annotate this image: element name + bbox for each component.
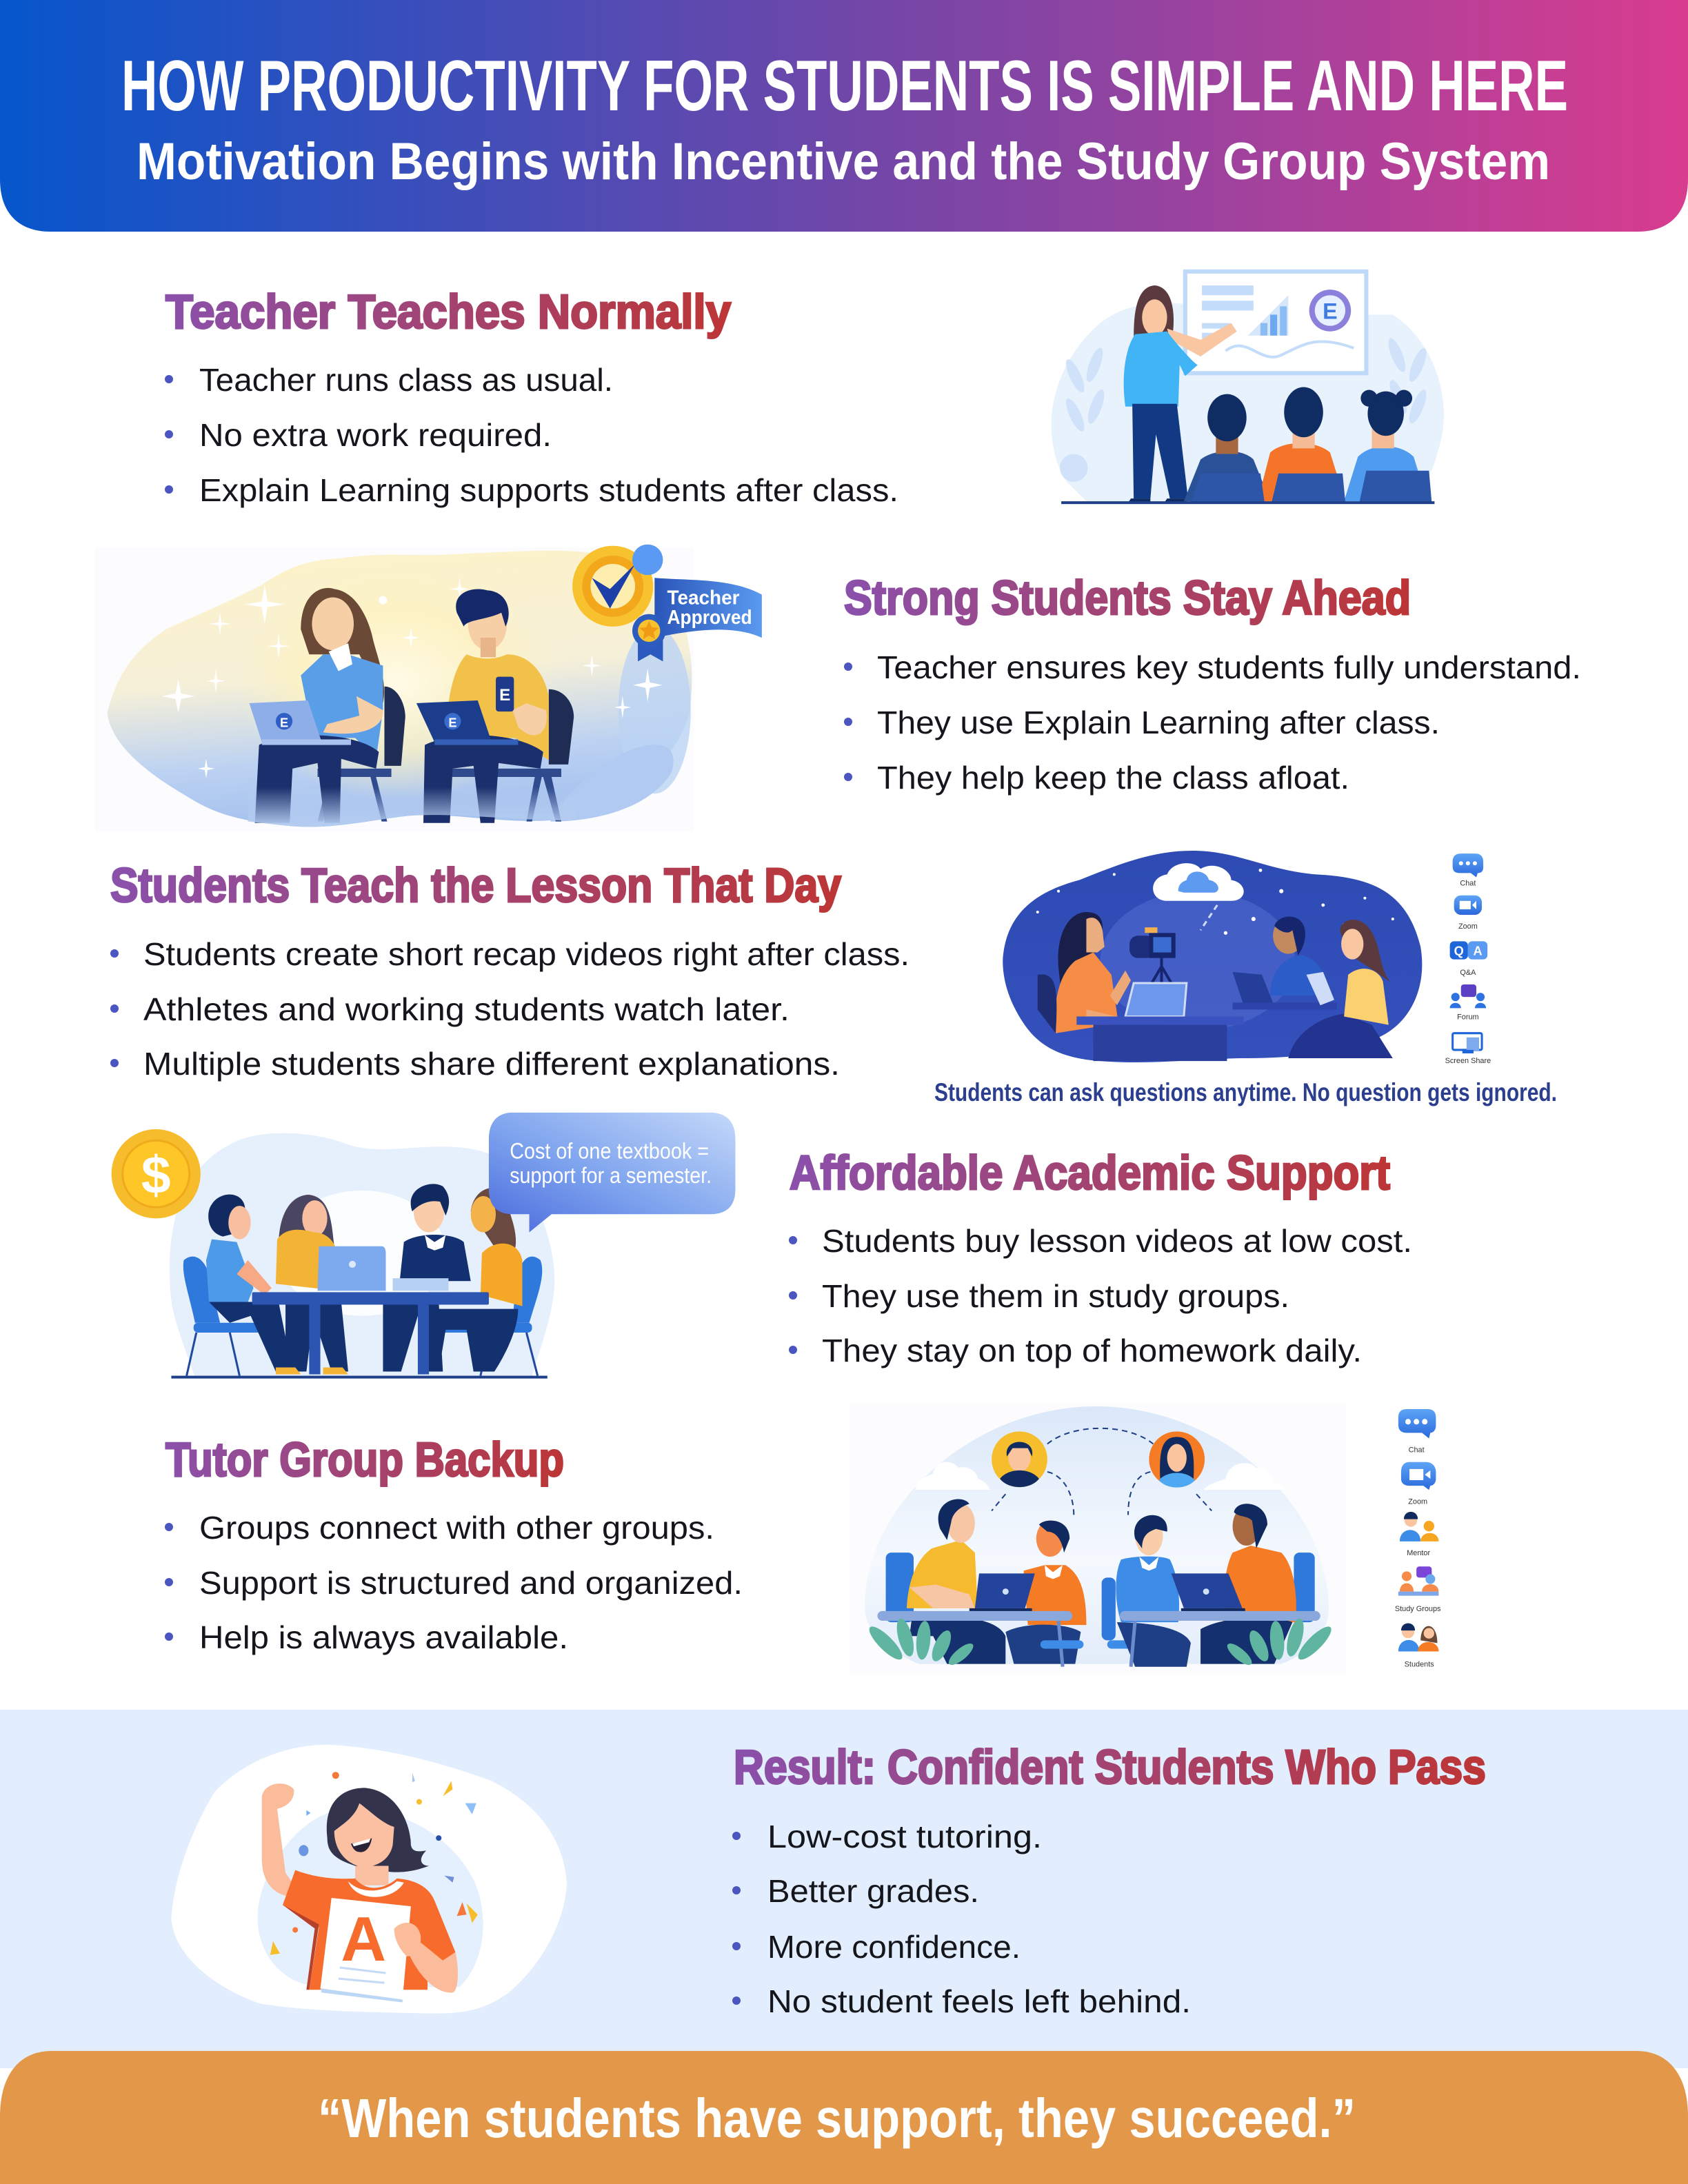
laptop and table [1076,983,1244,1061]
bullet list: Explain Learning supports students after class. [199,472,898,508]
icon: study groups [1395,1566,1441,1613]
avatar: mentor woman [1149,1431,1205,1488]
bullet list: No student feels left behind. [767,1983,1191,2019]
icon: screen share [1445,1033,1491,1065]
icon: zoom: Zoom [1458,922,1478,931]
icon: Q&A [1450,941,1487,977]
illustration: tutor groups connecting [850,1404,1441,1674]
icon: students: Students [1405,1661,1434,1669]
icon: dollar coin: $ [141,1146,171,1205]
bullet list: Teacher ensures key students fully understand. [877,649,1581,685]
camera on tripod [1129,927,1176,983]
bullet list: They help keep the class afloat. [877,760,1349,796]
icon: mentor [1400,1512,1438,1557]
bullet list: Athletes and working students watch later. [143,991,790,1027]
graded paper [321,1898,421,2002]
speech bubble: Cost of one textbook = [510,1138,709,1163]
section: affordable academic support [789,1146,1412,1368]
raised arm and girl [262,1783,458,1992]
section: teacher teaches normally [165,285,898,508]
badge: teacher approved: Teacher [667,587,740,609]
confetti [270,1772,478,1955]
bullet list: Better grades. [767,1873,979,1909]
bullet list: They use Explain Learning after class. [877,705,1440,740]
boy with phone: E [448,716,456,729]
speech bubble [489,1113,735,1233]
bullet list [789,1223,1412,1368]
bullet list: Help is always available. [199,1619,568,1655]
heading: Students Teach the Lesson That Day [110,858,841,912]
boy with phone [416,589,574,823]
bullet list: Multiple students share different explanations. [143,1046,840,1082]
section: result [732,1740,1486,2019]
table and laptop [252,1246,489,1375]
badge: teacher approved: Approved [667,606,752,628]
heading: Strong Students Stay Ahead [844,571,1411,625]
heading: Tutor Group Backup [165,1433,564,1486]
icon: study groups: Study Groups [1395,1605,1441,1613]
tool icons column [1395,1409,1441,1669]
bullet list: Students buy lesson videos at low cost. [822,1223,1412,1259]
illustration: strong students with badge [94,545,762,831]
bullet list: No extra work required. [199,417,552,453]
leaves [1060,336,1429,482]
girl with laptop: E [280,716,288,729]
bullet list [165,1510,743,1655]
whiteboard: E [1323,299,1338,324]
illustration: recording a recap video [1003,851,1491,1065]
person 4 [439,1188,522,1372]
tool icons column [1445,853,1491,1065]
chairs [183,1257,542,1333]
presenter [1038,912,1131,1033]
icon: Q&A: Q&A [1460,969,1476,977]
person 2 [276,1195,348,1375]
footer banner [0,2051,1688,2184]
fade over legs [248,787,575,827]
cloud [1153,863,1244,930]
icon: chat: Chat [1409,1446,1425,1455]
bullet list: Students create short recap videos right after class. [143,936,910,972]
section: strong students stay ahead [844,571,1581,796]
bullet list: They stay on top of homework daily. [822,1333,1362,1368]
illustration: confident student with A paper [171,1745,567,2014]
icon: zoom [1401,1462,1436,1506]
icon: chat: Chat [1460,880,1476,888]
sparkles [161,578,662,778]
subtitle: Motivation Begins with Incentive and the Study Group System [137,132,1550,191]
icon: dollar coin [112,1129,201,1218]
heading: Affordable Academic Support [790,1146,1390,1200]
bullet list: Low-cost tutoring. [767,1819,1042,1854]
icon: chat [1398,1409,1436,1455]
quote: “When students have support, they succeed.” [318,2087,1356,2149]
illustration: study group with coin and speech bubble [112,1113,735,1379]
bullet list: More confidence. [767,1929,1021,1965]
icon: students [1398,1624,1438,1669]
avatar: mentor man [992,1431,1047,1487]
icon: forum [1450,984,1486,1021]
icon: chat [1453,853,1483,888]
connecting dashes [992,1428,1212,1515]
heading: Result: Confident Students Who Pass [734,1740,1486,1794]
icon: forum: Forum [1457,1013,1479,1021]
result band [0,1710,1688,2068]
plant [865,1617,976,1668]
plant [1224,1617,1336,1668]
bullet list: They use them in study groups. [822,1278,1289,1314]
bullet list: Groups connect with other groups. [199,1510,714,1546]
icon: zoom: Zoom [1408,1497,1427,1506]
bullet list: Teacher runs class as usual. [199,362,613,398]
icon: Q&A: Q [1454,944,1464,958]
icon: zoom [1454,896,1482,931]
whiteboard [1185,272,1366,373]
header banner [0,0,1688,232]
boy with phone: E [499,686,510,705]
group right [1102,1504,1336,1668]
illustration: teacher at whiteboard [1052,272,1444,504]
bullet list [732,1819,1191,2019]
person 3 [383,1184,471,1372]
person 1 [206,1195,292,1372]
section: students teach the lesson [110,858,910,1082]
section: tutor group backup [165,1433,743,1655]
caption: ask questions: Students can ask questions anytime. No question gets ignored. [934,1078,1557,1106]
students [1061,387,1434,504]
bullet list [110,936,910,1082]
bullet list [844,649,1581,796]
heading: Teacher Teaches Normally [165,285,731,338]
icon: mentor: Mentor [1407,1549,1430,1557]
speech bubble: support for a semester. [510,1163,712,1188]
bullet list: Support is structured and organized. [199,1565,743,1601]
graded paper: A [341,1905,386,1974]
bullet list [165,362,898,508]
girl with laptop [250,588,405,823]
icon: Q&A: A [1473,944,1483,958]
two students [1233,916,1393,1058]
teacher [1124,285,1237,503]
icon: screen share: Screen Share [1445,1057,1491,1065]
group left [865,1499,1086,1668]
clouds [915,1462,1287,1490]
badge: teacher approved [572,545,762,661]
